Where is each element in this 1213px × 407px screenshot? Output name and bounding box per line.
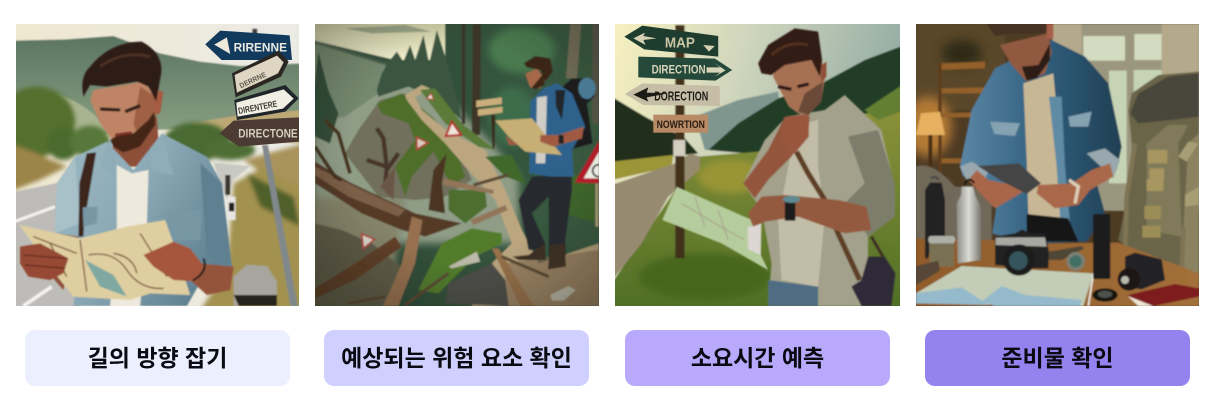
sign: DERRNE: DERRNE	[238, 70, 268, 90]
jacket	[960, 40, 1122, 243]
hiker	[559, 78, 595, 150]
sign: RIRENNE: RIRENNE	[234, 40, 287, 54]
sign: DIRECTIONE	[220, 117, 299, 147]
small wooden sign	[491, 115, 495, 148]
sign: DIRENTERE: DIRENTERE	[237, 99, 278, 116]
sign: NOWRTION	[653, 115, 708, 133]
road marker post	[234, 265, 277, 306]
notebook and compass	[1049, 246, 1084, 260]
label: 예상되는 위험 요소 확인: 예상되는 위험 요소 확인	[341, 344, 572, 370]
photo: man reading a map by the road	[16, 24, 299, 306]
sign: DIRECTION: DIRECTION	[652, 62, 706, 76]
sign: DIRECTION	[638, 57, 732, 81]
flashlight	[1093, 214, 1110, 279]
photo: man checking his watch by a trail signpost	[615, 24, 900, 306]
label: 소요시간 예측: 소요시간 예측	[691, 344, 824, 370]
label: 길의 방향 잡기: 길의 방향 잡기	[88, 344, 227, 370]
sign: MAP	[624, 26, 718, 57]
label: 예상되는 위험 요소 확인	[324, 330, 589, 386]
map	[916, 266, 1093, 306]
road sign	[595, 183, 598, 227]
red notebook	[1128, 284, 1199, 306]
sign: MAP: MAP	[665, 35, 695, 51]
table	[916, 238, 1199, 306]
label: 준비물 확인	[925, 330, 1190, 386]
thermos	[925, 183, 945, 258]
label: 준비물 확인: 준비물 확인	[1001, 344, 1114, 370]
sign: RIRENNE	[205, 31, 292, 60]
head	[1000, 33, 1052, 82]
warning triangles	[446, 122, 461, 136]
sign: DORECTION	[625, 83, 720, 106]
sign: DORECTION: DORECTION	[654, 90, 708, 104]
sign: NOWRTION: NOWRTION	[657, 119, 705, 131]
tablet and hands	[1037, 163, 1113, 208]
sign: DIRENTERE	[234, 85, 299, 120]
man	[19, 42, 234, 306]
sign: DERRNE	[232, 51, 289, 97]
backpack	[1118, 72, 1199, 275]
rocky hill	[345, 93, 472, 200]
camera	[995, 229, 1049, 268]
photo: hiker on a trail with hazards	[315, 24, 599, 306]
photo: man checking gear on a table	[916, 24, 1199, 306]
label: 소요시간 예측	[625, 330, 890, 386]
logs	[315, 162, 462, 237]
second camera	[1125, 253, 1165, 289]
man	[662, 28, 895, 306]
label: 길의 방향 잡기	[25, 330, 290, 386]
